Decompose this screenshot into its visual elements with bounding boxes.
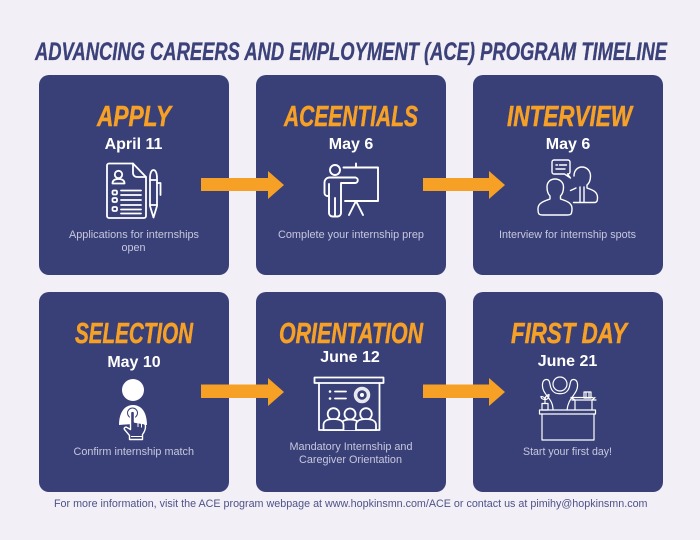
text: orientation description (290, 441, 412, 466)
date: april 11: April 11 (105, 136, 162, 153)
heading: interview: INTERVIEW (507, 101, 634, 133)
text: apply description (69, 229, 199, 254)
icon: audience at presentation screen (314, 378, 384, 430)
icon: person with tapping hand (119, 379, 147, 440)
heading: first day: FIRST DAY (511, 318, 629, 350)
text: orientation description: Caregiver Orientation (299, 454, 402, 466)
date: may 10: May 10 (107, 354, 161, 371)
text: apply description: Applications for internships (69, 229, 199, 241)
date: may 6: May 6 (546, 136, 590, 153)
arrow: selection to orientation (201, 378, 284, 406)
heading: orientation: ORIENTATION (279, 318, 424, 350)
panel: first day (473, 292, 663, 492)
date: june 21: June 21 (538, 353, 597, 370)
arrow: apply to aceentials (201, 171, 284, 199)
icon: presenter at board (324, 164, 378, 216)
panel: interview (473, 75, 663, 275)
panel: selection (39, 292, 229, 492)
icon: application form and pen (107, 164, 160, 218)
icon: two people talking (538, 160, 598, 215)
text: first day description: Start your first day! (523, 446, 612, 458)
date: may 6: May 6 (329, 136, 373, 153)
heading: aceentials: ACEENTIALS (283, 101, 418, 133)
heading: apply: APPLY (96, 101, 173, 133)
text: selection description: Confirm internship match (74, 446, 194, 458)
text: aceentials description: Complete your internship prep (278, 229, 424, 241)
icon: person celebrating behind desk (540, 377, 596, 440)
panel: aceentials (256, 75, 446, 275)
arrow: aceentials to interview (423, 171, 505, 199)
footer note: For more information, visit the ACE program webpage at www.hopkinsmn.com/ACE or contact us at pimihy@hopkinsmn.com (54, 498, 648, 510)
text: interview description: Interview for internship spots (499, 229, 636, 241)
panel: apply (39, 75, 229, 275)
panel: orientation (256, 292, 446, 492)
heading: selection: SELECTION (75, 318, 194, 350)
text: apply description: open (122, 242, 146, 254)
arrow: orientation to first day (423, 378, 505, 406)
date: june 12: June 12 (320, 349, 380, 366)
text: orientation description: Mandatory Internship and (290, 441, 412, 453)
